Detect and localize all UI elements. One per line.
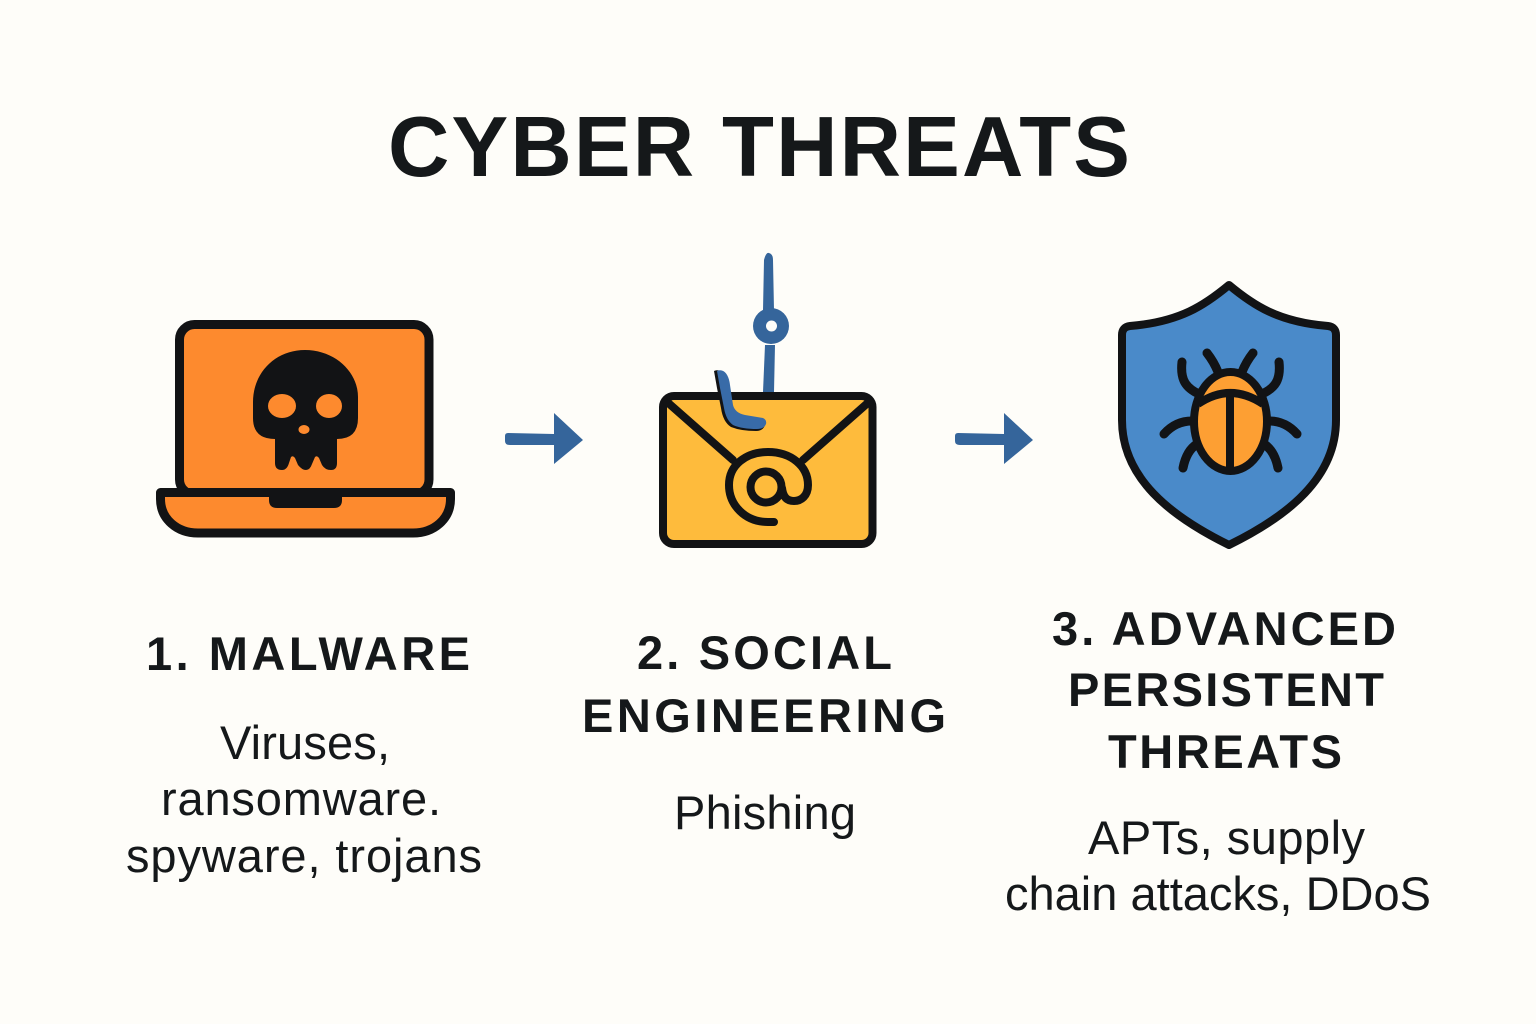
arrow: malware to social engineering — [505, 413, 583, 464]
laptop notch — [269, 492, 342, 508]
column 3 description — [1005, 811, 1431, 920]
fishing line and ring — [753, 253, 789, 392]
column 2 heading — [582, 626, 946, 742]
column 2 description: Phishing — [674, 786, 856, 839]
column 1 description: Viruses, — [220, 716, 390, 769]
bug legs — [1164, 353, 1297, 468]
column 2 heading: ENGINEERING — [582, 689, 946, 742]
shield — [1122, 285, 1336, 545]
laptop base — [160, 492, 450, 533]
laptop screen — [180, 324, 429, 494]
bug body — [1194, 372, 1267, 471]
column 3 heading: THREATS — [1108, 725, 1342, 778]
icon: shield with bug — [1122, 285, 1336, 545]
column 3 heading — [1052, 602, 1396, 778]
skull — [253, 350, 358, 470]
column 3 heading: 3. ADVANCED — [1052, 602, 1396, 655]
bug head band and wing split — [1198, 393, 1263, 470]
column 2 heading: 2. SOCIAL — [637, 626, 892, 679]
icon: laptop with skull — [160, 324, 450, 533]
arrow: social engineering to advanced threats — [955, 413, 1033, 464]
column 3 description: APTs, supply — [1088, 811, 1366, 864]
column 3 description: chain attacks, DDoS — [1005, 867, 1431, 920]
column 1 description: ransomware. — [161, 772, 441, 825]
column 3 heading: PERSISTENT — [1068, 663, 1384, 716]
column 1 heading: 1. MALWARE — [146, 627, 470, 680]
hook barb — [714, 370, 766, 431]
envelope body — [663, 396, 872, 544]
column 1 description: spyware, trojans — [126, 829, 482, 882]
column 1 description — [126, 716, 482, 882]
icon: phishing envelope — [663, 253, 872, 544]
envelope flap — [666, 401, 870, 460]
title: CYBER THREATS — [388, 100, 1130, 195]
at sign — [729, 452, 808, 522]
